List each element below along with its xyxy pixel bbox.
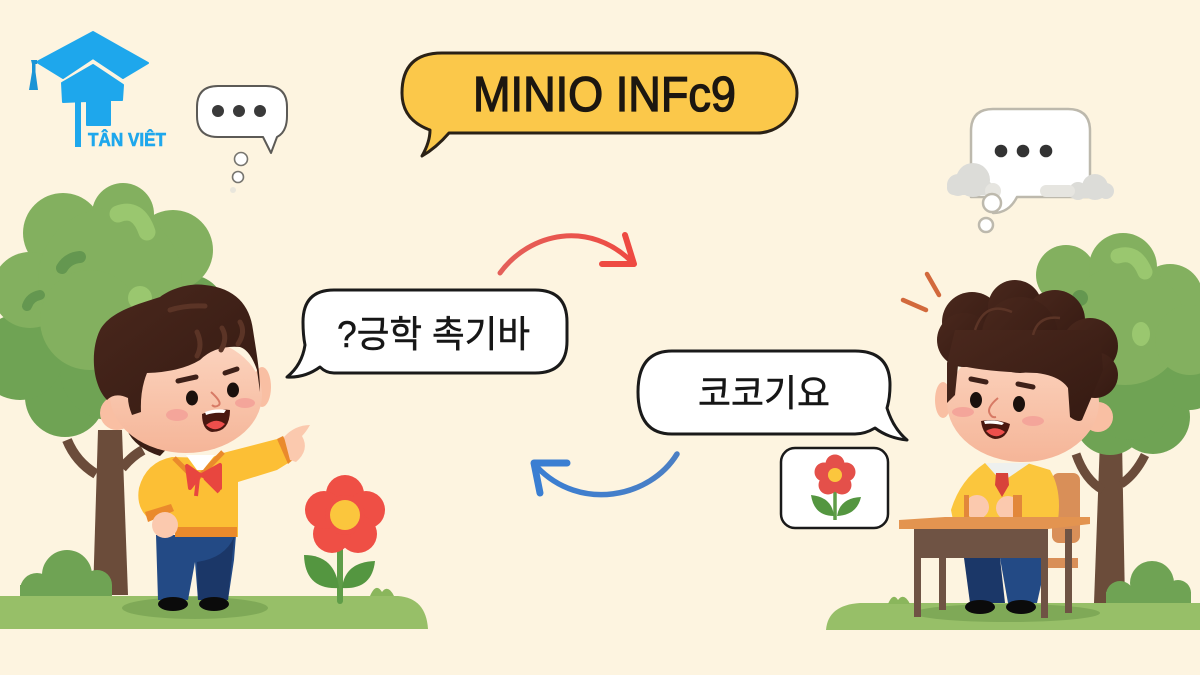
excitement ticks <box>903 274 939 310</box>
logo: Tan Viet graduation cap <box>29 32 166 150</box>
ground <box>826 603 1200 630</box>
tree canopy <box>1036 233 1200 455</box>
bush <box>20 550 112 607</box>
right character: boy at desk <box>899 280 1118 622</box>
thought circles <box>979 194 1001 232</box>
left cloud <box>947 163 1001 199</box>
right ground and tree <box>826 233 1200 630</box>
ellipsis dots <box>212 105 266 117</box>
desk <box>899 517 1090 618</box>
flower centre <box>330 500 360 530</box>
cheeks <box>952 407 1044 426</box>
icon: logo bar <box>75 102 81 147</box>
hair highlights <box>170 306 243 356</box>
bush <box>1106 561 1191 609</box>
grass tufts <box>888 597 910 604</box>
left flower <box>304 475 385 601</box>
chair <box>1047 473 1080 613</box>
icon: up arrow <box>62 65 123 125</box>
eyes <box>186 382 239 406</box>
tree trunk and branches <box>1076 440 1145 603</box>
hair <box>94 285 260 415</box>
face <box>947 342 1099 462</box>
speech bubble: right answer <box>638 351 907 440</box>
hair behind neck <box>127 425 175 456</box>
mouth <box>981 420 1010 439</box>
hands <box>964 495 1022 520</box>
mouth <box>202 409 230 432</box>
logo text: TÂN VIÊT <box>88 129 166 150</box>
bubble text: ?긍학 촉기바 <box>337 314 530 355</box>
bubble shape <box>287 290 567 377</box>
faint thought dot <box>230 187 236 193</box>
eyes <box>970 392 1025 412</box>
ears <box>100 367 271 430</box>
shoes <box>158 597 229 611</box>
right cloud <box>1040 174 1114 200</box>
bubble text: 코코기요 <box>698 373 830 414</box>
ellipsis dots <box>995 145 1052 157</box>
shadow <box>914 604 1100 622</box>
stem <box>337 540 343 601</box>
cheeks <box>166 398 255 421</box>
eyebrows <box>178 369 237 381</box>
speech bubble: left question <box>287 290 567 377</box>
blazer <box>951 463 1059 520</box>
tree canopy <box>0 183 225 437</box>
card <box>781 448 888 528</box>
hands <box>152 425 310 538</box>
tree trunk and branches <box>67 430 143 595</box>
card flower icon <box>811 454 861 520</box>
ground <box>0 596 428 629</box>
icon: cap top <box>37 32 148 78</box>
nose <box>211 392 220 406</box>
petals <box>305 475 385 553</box>
shadow <box>122 597 268 619</box>
cuffs and hem <box>145 436 295 537</box>
leaves <box>304 555 375 588</box>
trousers <box>156 535 236 600</box>
bubble shape <box>638 351 907 440</box>
sweater <box>138 439 293 537</box>
bubble outline <box>197 86 287 153</box>
small thought bubble, top left <box>197 86 287 193</box>
ears <box>935 382 1113 432</box>
curly hair <box>937 280 1118 421</box>
grass tufts <box>370 588 394 596</box>
thought circles <box>232 152 248 182</box>
face <box>110 337 262 453</box>
title bubble <box>402 53 797 156</box>
title shape <box>402 53 797 156</box>
left ground and tree <box>0 183 428 629</box>
eyebrows <box>971 379 1033 387</box>
thought bubble with clouds, top right <box>947 109 1114 232</box>
shirt and tie <box>985 463 1030 497</box>
title text: MINIO INFc9 <box>473 68 736 122</box>
bubble outline <box>971 109 1090 213</box>
collar and bow <box>174 452 223 496</box>
left character: boy pointing <box>94 285 310 619</box>
nose <box>989 398 998 417</box>
trousers <box>964 558 1047 603</box>
flower card <box>781 448 888 528</box>
icon: tassel <box>29 60 38 90</box>
arrow: red curved to the right <box>500 235 634 273</box>
hair highlights <box>975 309 1060 335</box>
arrow: blue curved to the left <box>534 454 677 495</box>
shoes <box>965 600 1036 614</box>
